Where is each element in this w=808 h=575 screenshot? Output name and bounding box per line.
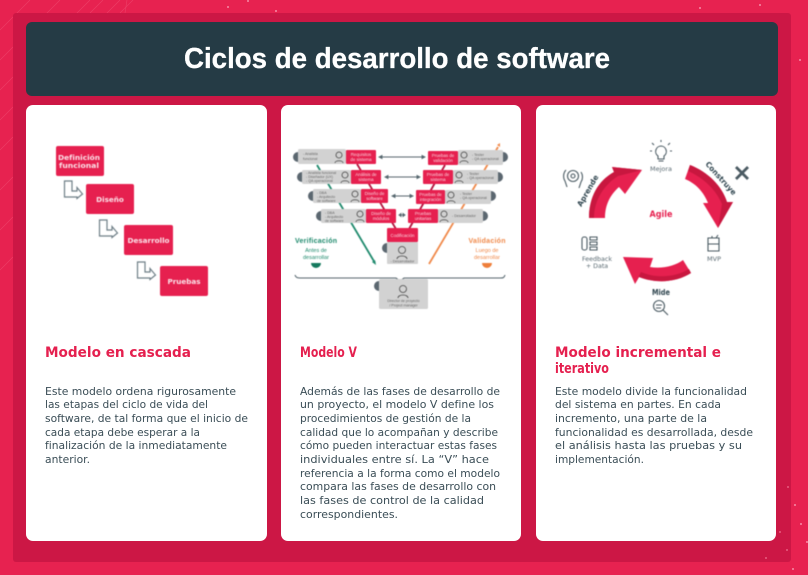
row 1 left: de sistema: [350, 157, 372, 162]
row 2 right: - QA operacional: [467, 176, 494, 180]
label: Validación: desarrollar: [474, 255, 500, 261]
text: modelo V: cómo pueden interactuar estas fases: [300, 439, 497, 452]
text: modelo V: compara las fases de desarrollo con: [300, 480, 496, 493]
step: Diseño: Diseño: [96, 195, 124, 204]
label: Verificación: [295, 238, 337, 268]
step: Definición funcional: Definición: [58, 153, 100, 162]
row 3 left: software: [366, 196, 383, 201]
node: Mejora: Mejora: [650, 166, 672, 173]
text: cascada: anterior.: [45, 453, 90, 466]
row 4 left: de software: [325, 219, 344, 223]
row 1 right: - QA operacional: [472, 157, 499, 161]
row 4 left: [316, 209, 396, 223]
label: Validación: [468, 238, 506, 268]
label: Agile: Agile: [650, 210, 672, 220]
heading: Modelo en cascada: Modelo en cascada: [45, 345, 191, 361]
row 4 left: módulos: [373, 216, 390, 221]
label: Mide: Mide: [652, 288, 670, 297]
text: incremental: funcionalidad es desarrollada, desde: [555, 426, 753, 439]
text: modelo V: calidad que lo acompañan y describe: [300, 426, 498, 439]
text: cascada: las etapas del ciclo de vida del: [45, 398, 208, 411]
text: modelo V: Además de las fases de desarrollo de: [300, 385, 500, 398]
green verification line: [317, 165, 376, 265]
step: Pruebas: Pruebas: [167, 277, 201, 286]
panel: modelo V: [281, 105, 521, 541]
row 2 left: - Analista funcional: [306, 171, 336, 175]
title: Ciclos de desarrollo de software: [184, 43, 610, 75]
row 4 left: Diseño de: [371, 211, 391, 216]
text: modelo V: correspondientes.: [300, 508, 398, 521]
arrow 2: [100, 220, 118, 238]
row 4 right: - Desarrollador: [452, 214, 477, 218]
row 4 right: [408, 209, 488, 223]
row 2 right: [423, 170, 503, 184]
dark red V lines: [357, 164, 445, 229]
V diagram: [293, 143, 508, 309]
text: modelo V: procedimientos de gestión de la: [300, 412, 471, 425]
row 1 right: Pruebas de: [432, 153, 455, 158]
icon: gear head: [564, 170, 582, 188]
heading: Modelo incremental e iterativo: iterativo: [555, 361, 609, 377]
label: Aprende: Aprende: [575, 173, 600, 208]
step: Desarrollo: Desarrollo: [128, 236, 170, 245]
project manager box: [374, 279, 428, 309]
heading: Modelo incremental e iterativo: Modelo incremental e: [555, 345, 721, 361]
node: Mejora: [650, 140, 672, 173]
node: Feedback + Data: [582, 237, 612, 270]
project manager box: / Project manager: [389, 304, 418, 308]
row 3 left: de software: [317, 199, 336, 203]
step: Desarrollo: [124, 225, 173, 255]
row 3 right: integración: [420, 197, 442, 202]
row 1 right: validación: [433, 158, 453, 163]
icon: tools: [736, 167, 748, 179]
step: Diseño: [86, 184, 134, 214]
waterfall diagram: [56, 146, 208, 296]
step: Definición funcional: [56, 146, 104, 176]
row 2 left: sistema: [358, 177, 374, 182]
row 2 right: Pruebas de: [427, 172, 450, 177]
heading: Modelo V: Modelo V: [300, 345, 358, 361]
row 3 right: [416, 190, 496, 204]
arrow: Mide to Feedback: [623, 257, 691, 284]
row 3 left: Diseño de: [365, 191, 385, 196]
text: modelo V: referencia a la forma como el modelo: [300, 467, 500, 480]
text: cascada: [45, 385, 248, 466]
node: MVP: MVP: [707, 256, 721, 263]
panel: incremental: [536, 105, 776, 541]
label: Verificación: Verificación: [295, 238, 337, 245]
label: Construye: Construye: [703, 160, 738, 197]
text: modelo V: las fases de control de la calidad: [300, 494, 484, 507]
node: MVP: [707, 235, 721, 263]
text: incremental: el análisis hasta las pruebas y su: [555, 439, 742, 452]
text: cascada: software, de tal forma que el inicio de: [45, 412, 248, 425]
bracket: [295, 275, 505, 281]
row 1 right: [428, 150, 508, 165]
text: modelo V: [300, 385, 500, 521]
arrow 1: [64, 181, 82, 198]
text: incremental: [555, 385, 753, 466]
row 4 right: Pruebas: [415, 211, 432, 216]
row 2 left: - QA operacional: [306, 179, 333, 183]
row 4 left: - DBA: [325, 211, 335, 215]
row 2 right: sistema: [430, 177, 446, 182]
row 3 left: - DBA: [317, 191, 327, 195]
title banner: [26, 22, 778, 96]
panel: cascada: [26, 105, 267, 541]
text: incremental: incremento, una parte de la: [555, 412, 707, 425]
coding box: [382, 228, 418, 264]
node: Feedback + Data: Feedback: [582, 256, 612, 263]
step: Pruebas: [160, 266, 208, 296]
row 2 left: [297, 170, 381, 184]
row 1 left: funcional: [303, 157, 318, 161]
horizontal links: [379, 156, 425, 216]
arrow: Aprende to Mejora: [589, 167, 642, 218]
row 4 left: - Arquitecto: [325, 215, 343, 219]
project manager box: Director de proyecto: [387, 299, 420, 303]
label: Validación: Luego de: [476, 248, 498, 254]
text: incremental: Este modelo divide la funcionalidad: [555, 385, 747, 398]
arrow: Construye to MVP: [685, 165, 733, 228]
row 3 right: Pruebas de: [419, 192, 442, 197]
row 2 left: - Diseñador (UX): [306, 175, 333, 179]
row 3 right: - QA operacional: [460, 196, 487, 200]
text: incremental: implementación.: [555, 453, 644, 466]
row 1 left: - Analista: [303, 152, 318, 156]
text: cascada: Este modelo ordena rigurosamente: [45, 385, 236, 398]
node: Feedback + Data: + Data: [586, 263, 608, 270]
row 3 right: - Tester: [460, 192, 473, 196]
row 2 left: Análisis de: [355, 172, 377, 177]
text: cascada: cada etapa debe esperar a la: [45, 426, 200, 439]
coding box: - Desarrollador: [391, 260, 415, 264]
step: Definición funcional: funcional: [59, 161, 99, 170]
agile cycle diagram: [564, 140, 748, 315]
row 4 right: unitarias: [415, 216, 432, 221]
coding box: Codificación: [391, 233, 415, 238]
row 1 left: [293, 149, 376, 164]
text: modelo V: individuales entre sí. La “V” hace: [300, 453, 489, 466]
row 1 left: Requisitos: [351, 152, 372, 157]
text: incremental: del sistema en partes. En cada: [555, 398, 721, 411]
label: Validación: Validación: [468, 238, 506, 245]
text: cascada: finalización de la inmediatamente: [45, 439, 227, 452]
orange validation line: [429, 143, 500, 264]
arrow 3: [138, 262, 156, 280]
text: modelo V: un proyecto, el modelo V define los: [300, 398, 494, 411]
icon: magnifier: [654, 300, 668, 315]
row 3 left: - Arquitecto: [317, 195, 335, 199]
heading: Modelo incremental e iterativo: [555, 345, 721, 377]
row 2 right: - Tester: [467, 172, 480, 176]
row 3 left: [308, 189, 388, 203]
row 1 right: - Tester: [472, 153, 485, 157]
label: Verificación: Antes de: [305, 248, 327, 254]
label: Verificación: desarrollar: [303, 255, 329, 261]
